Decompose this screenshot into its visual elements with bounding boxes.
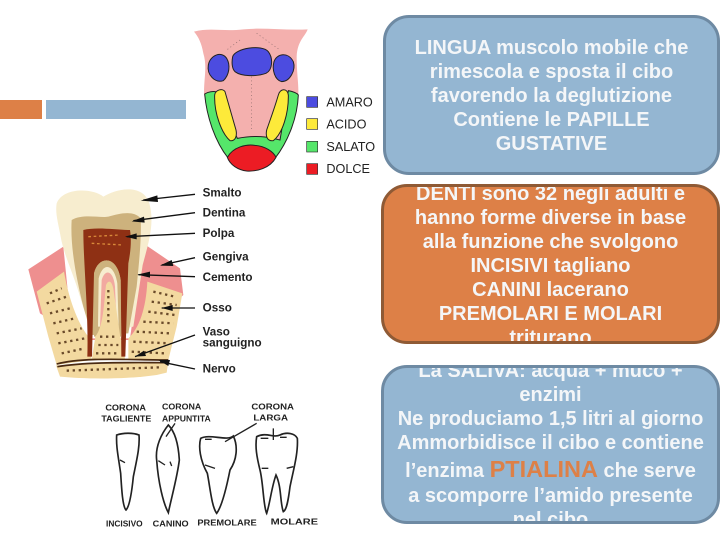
text: denti description <box>415 184 686 344</box>
legend: ACIDO <box>326 118 367 132</box>
legend: DOLCE <box>326 162 370 176</box>
acido zones <box>215 90 288 141</box>
handwritten labels: INCISIVO <box>106 519 143 529</box>
tooth outlines <box>117 425 297 513</box>
pulp chamber and canals <box>83 229 131 357</box>
amaro zones <box>208 48 294 82</box>
handwritten labels: CORONA <box>162 401 202 411</box>
handwritten labels: CANINO <box>153 519 189 529</box>
text: denti description: hanno forme diverse in base <box>415 207 686 229</box>
legend: AMARO <box>326 96 373 110</box>
labels: Dentina <box>203 207 246 220</box>
salato zone <box>205 91 298 158</box>
nerve <box>57 359 168 367</box>
text: saliva description: enzimi <box>519 384 582 406</box>
labels: Osso <box>203 302 232 315</box>
decorative orange bar <box>0 100 42 119</box>
crown pointers <box>120 423 293 468</box>
panel: saliva <box>381 365 720 524</box>
text: lingua description: Contiene le PAPILLE <box>453 109 650 131</box>
text: saliva description: a scomporre l’amido presente <box>408 485 693 507</box>
labels <box>203 187 262 376</box>
labels: Nervo <box>203 363 236 376</box>
labels: Smalto <box>203 187 242 200</box>
text: lingua description: rimescola e sposta il cibo <box>430 61 673 83</box>
legend <box>307 96 375 176</box>
handwritten labels: LARGA <box>253 413 289 423</box>
labels: Cemento <box>203 271 253 284</box>
text: lingua description <box>415 37 688 155</box>
panel: denti <box>381 184 720 344</box>
text: saliva description: l’enzima PTIALINA che serve <box>405 456 696 482</box>
handwritten labels: TAGLIENTE <box>101 414 152 424</box>
tooth cross-section diagram <box>28 187 262 378</box>
text: lingua description: LINGUA muscolo mobile che <box>415 37 688 59</box>
labels: Polpa <box>203 227 235 240</box>
decorative blue bar <box>46 100 186 119</box>
text: denti description: CANINI lacerano <box>472 279 629 301</box>
text: saliva description: Ne produciamo 1,5 litri al giorno <box>398 408 703 430</box>
gum <box>28 243 183 340</box>
handwritten labels: CORONA <box>105 403 147 413</box>
bone <box>37 272 182 378</box>
handwritten labels: MOLARE <box>271 517 318 527</box>
text: saliva description: Ammorbidisce il cibo e contiene <box>397 432 704 454</box>
text: lingua description: favorendo la deglutizione <box>431 85 672 107</box>
handwritten labels: APPUNTITA <box>162 413 211 423</box>
labels: Gengiva <box>203 251 249 264</box>
text: denti description: alla funzione che svolgono <box>423 231 678 253</box>
handwritten labels: PREMOLARE <box>197 517 257 527</box>
legend: SALATO <box>326 140 375 154</box>
hand-drawn tooth types <box>101 401 318 529</box>
root core <box>94 260 121 337</box>
text: denti description: INCISIVI tagliano <box>470 255 631 277</box>
labels: Vaso <box>203 326 230 339</box>
dentin <box>71 213 141 335</box>
enamel crown <box>56 189 151 335</box>
text: denti description: PREMOLARI E MOLARI <box>439 303 662 325</box>
tongue taste map diagram <box>194 28 375 176</box>
text: saliva description <box>397 365 704 524</box>
tongue shape <box>194 29 308 170</box>
panel: lingua <box>383 15 720 175</box>
labels: sanguigno <box>203 336 262 349</box>
handwritten labels: CORONA <box>251 401 295 411</box>
arrows <box>125 194 195 369</box>
text: lingua description: GUSTATIVE <box>496 133 607 155</box>
handwritten labels <box>101 401 318 529</box>
dolce zone <box>227 145 276 171</box>
